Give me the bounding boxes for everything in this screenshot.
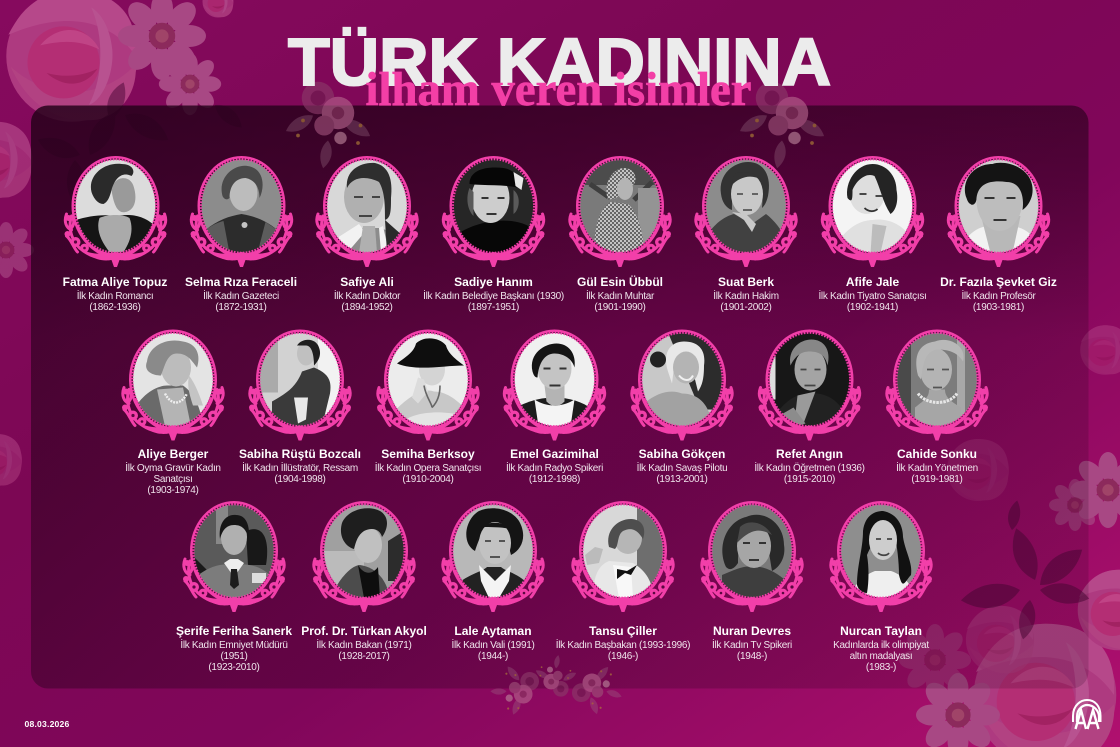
dark content panel [31, 106, 1088, 688]
caption: (1901-1990) [594, 302, 646, 313]
caption: Kadınlarda ilk olimpiyat [833, 640, 929, 651]
caption [451, 624, 535, 662]
portrait [701, 502, 803, 612]
portrait [948, 157, 1050, 267]
portrait [64, 157, 166, 267]
caption: (1948-) [737, 651, 767, 662]
profile: Safiye Ali [316, 157, 418, 313]
caption: Cahide Sonku [897, 447, 977, 461]
caption [940, 275, 1057, 313]
portrait [190, 157, 292, 267]
caption: İlk Kadın Romancı [77, 289, 153, 302]
caption: (1983-) [866, 662, 896, 673]
caption: (1913-2001) [656, 474, 708, 485]
profile: Sabiha Gökçen [631, 331, 733, 485]
caption [556, 624, 690, 662]
caption [334, 275, 401, 313]
profile: Semiha Berksoy [375, 331, 481, 485]
portrait [695, 157, 797, 267]
caption: (1897-1951) [468, 302, 519, 313]
caption: Aliye Berger [138, 447, 209, 461]
caption: (1903-1981) [973, 302, 1024, 313]
caption [63, 275, 167, 313]
caption [423, 275, 564, 313]
caption: Nurcan Taylan [840, 624, 922, 638]
profile: Aliye Berger [122, 331, 224, 496]
caption: İlk Kadın Emniyet Müdürü [180, 638, 288, 651]
caption: Dr. Fazıla Şevket Giz [940, 275, 1057, 289]
profile: Fatma Aliye Topuz [63, 157, 167, 313]
caption: (1902-1941) [847, 302, 898, 313]
caption: altın madalyası [850, 651, 912, 662]
portrait [504, 331, 606, 440]
caption: İlk Kadın Radyo Spikeri [506, 461, 603, 474]
portrait [377, 331, 479, 440]
caption: İlk Kadın Muhtar [586, 289, 655, 302]
caption: (1862-1936) [89, 302, 141, 313]
profile: Suat Berk [695, 157, 797, 313]
profile: Prof. Dr. Türkan Akyol [301, 502, 427, 662]
caption [506, 447, 603, 485]
title: TÜRK KADININA [288, 25, 831, 100]
caption: İlk Kadın Tv Spikeri [712, 638, 792, 651]
caption: Safiye Ali [340, 275, 394, 289]
portrait [572, 502, 674, 612]
caption: Lale Aytaman [454, 624, 532, 638]
portrait [442, 157, 544, 267]
profile: Nurcan Taylan [830, 502, 932, 673]
portrait [886, 331, 988, 440]
profile: Sadiye Hanım [423, 157, 564, 313]
caption: (1910-2004) [402, 474, 454, 485]
subtitle: ilham veren isimler [366, 63, 752, 116]
caption: Selma Rıza Feraceli [185, 275, 297, 289]
caption: (1901-2002) [720, 302, 772, 313]
profile: Afife Jale [818, 157, 927, 313]
caption: İlk Kadın Öğretmen (1936) [754, 461, 865, 474]
caption: İlk Kadın Yönetmen [896, 461, 978, 474]
profile: Emel Gazimihal [504, 331, 606, 485]
profile: Sabiha Rüştü Bozcalı [239, 331, 361, 485]
caption: Sanatçısı [154, 474, 192, 485]
portrait [758, 331, 860, 440]
portrait [830, 502, 932, 612]
caption [833, 624, 929, 673]
caption: Gül Esin Übbül [577, 274, 663, 289]
caption: Sadiye Hanım [454, 275, 533, 289]
caption [375, 447, 481, 485]
profile: Selma Rıza Feraceli [185, 157, 297, 313]
caption: İlk Kadın Opera Sanatçısı [375, 461, 481, 474]
caption: (1944-) [478, 651, 508, 662]
caption: (1915-2010) [784, 474, 835, 485]
caption: Nuran Devres [713, 624, 791, 638]
caption [818, 275, 927, 313]
portrait [822, 157, 924, 267]
profile: Gül Esin Übbül [569, 157, 671, 313]
portrait [313, 502, 415, 612]
caption: İlk Oyma Gravür Kadın [125, 461, 221, 474]
caption: İlk Kadın Hakim [713, 289, 779, 302]
caption: Refet Angın [776, 447, 843, 461]
caption: Tansu Çiller [589, 624, 657, 638]
caption [301, 624, 427, 662]
caption [176, 624, 292, 673]
logo: AA [1073, 700, 1100, 729]
caption: Şerife Feriha Sanerk [176, 624, 292, 638]
caption: (1903-1974) [147, 485, 199, 496]
caption: İlk Kadın Savaş Pilotu [637, 461, 727, 474]
caption: Suat Berk [718, 275, 774, 289]
caption: Semiha Berksoy [381, 447, 475, 461]
caption: (1928-2017) [338, 651, 390, 662]
profile: Refet Angın [754, 331, 865, 485]
portrait [183, 502, 285, 612]
portrait [442, 502, 544, 612]
caption: İlk Kadın Bakan (1971) [316, 638, 412, 651]
date: 08.03.2026 [24, 719, 70, 729]
caption [185, 275, 297, 313]
caption: Sabiha Gökçen [639, 447, 725, 461]
caption: Afife Jale [846, 275, 900, 289]
profile: Tansu Çiller [556, 502, 690, 662]
profile: Nuran Devres [701, 502, 803, 662]
caption: İlk Kadın Tiyatro Sanatçısı [818, 289, 927, 302]
caption: Emel Gazimihal [510, 447, 599, 461]
caption [896, 447, 978, 485]
caption: İlk Kadın Profesör [961, 289, 1037, 302]
profile: Cahide Sonku [886, 331, 988, 485]
caption: Fatma Aliye Topuz [63, 275, 167, 289]
caption: (1951) [220, 651, 248, 662]
caption: İlk Kadın Belediye Başkanı (1930) [423, 289, 564, 302]
caption [713, 275, 779, 313]
caption: (1912-1998) [529, 474, 580, 485]
caption [239, 447, 361, 485]
portrait [569, 157, 671, 267]
caption: İlk Kadın Gazeteci [203, 289, 279, 302]
caption [712, 624, 792, 662]
caption [577, 274, 663, 313]
caption: (1904-1998) [274, 474, 326, 485]
caption: (1894-1952) [341, 302, 393, 313]
portrait [249, 331, 351, 440]
caption: (1872-1931) [215, 302, 267, 313]
caption [125, 447, 221, 496]
portrait [631, 331, 733, 440]
caption: Prof. Dr. Türkan Akyol [301, 624, 427, 638]
profile: Şerife Feriha Sanerk [176, 502, 292, 673]
caption: İlk Kadın Başbakan (1993-1996) [556, 638, 690, 651]
caption: (1946-) [608, 651, 638, 662]
portrait [316, 157, 418, 267]
portrait [122, 331, 224, 440]
caption: İlk Kadın İllüstratör, Ressam [242, 461, 358, 474]
caption [637, 447, 727, 485]
caption: İlk Kadın Doktor [334, 289, 401, 302]
profile: Dr. Fazıla Şevket Giz [940, 157, 1057, 313]
profile: Lale Aytaman [442, 502, 544, 662]
title ornaments [283, 82, 827, 720]
caption: Sabiha Rüştü Bozcalı [239, 447, 361, 461]
caption: İlk Kadın Vali (1991) [451, 638, 535, 651]
caption [754, 447, 865, 485]
caption: (1919-1981) [911, 474, 963, 485]
caption: (1923-2010) [208, 662, 260, 673]
